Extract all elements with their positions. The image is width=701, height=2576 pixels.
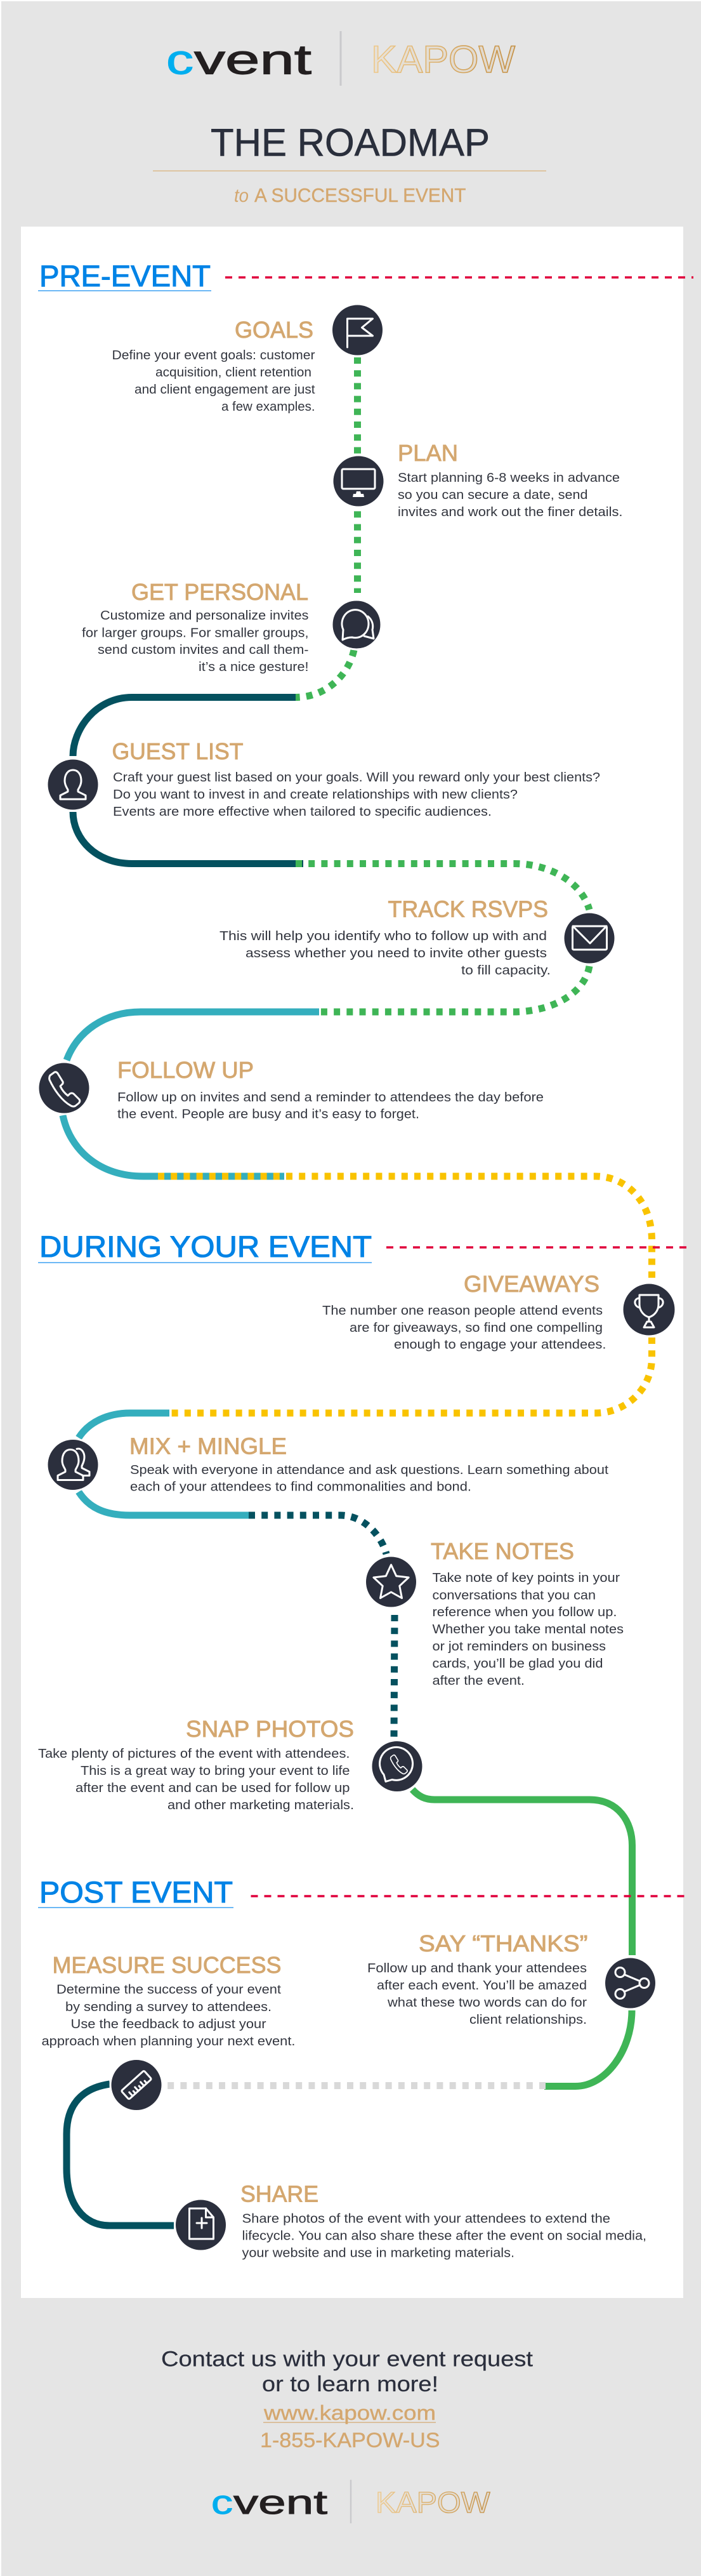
text block: Take plenty of pictures of the event with attendees. bbox=[38, 1747, 350, 1761]
icon: phone bbox=[38, 1062, 90, 1114]
route: follow up upper bbox=[67, 1012, 319, 1060]
white content panel bbox=[21, 227, 683, 2298]
text block: after the event and can be used for follow up bbox=[75, 1781, 350, 1795]
text block bbox=[242, 2212, 646, 2260]
text block: Craft your guest list based on your goals. Will you reward only your best clients? bbox=[113, 771, 600, 785]
text block: Determine the success of your event bbox=[56, 1983, 281, 1997]
header logos bbox=[166, 31, 515, 86]
heading: MIX + MINGLE bbox=[129, 1433, 287, 1459]
logo: cvent bbox=[211, 2484, 327, 2521]
icon: star bbox=[365, 1556, 417, 1608]
route: from track rsvps bbox=[319, 966, 589, 1012]
heading: MEASURE SUCCESS bbox=[52, 1952, 282, 1978]
text block bbox=[42, 1983, 296, 2048]
icon: share nodes bbox=[604, 1957, 656, 2009]
text block bbox=[322, 1304, 606, 1352]
text block: and client engagement are just bbox=[134, 383, 315, 397]
route: to take notes bbox=[249, 1515, 386, 1554]
step: guest list bbox=[47, 738, 600, 819]
heading: GUEST LIST bbox=[112, 738, 244, 764]
text block: Start planning 6-8 weeks in advance bbox=[398, 471, 620, 485]
heading: PLAN bbox=[398, 440, 458, 466]
icon: monitor bbox=[332, 455, 384, 507]
text block: after the event. bbox=[433, 1674, 525, 1688]
text block: for larger groups. For smaller groups, bbox=[82, 626, 308, 640]
text block: invites and work out the finer details. bbox=[398, 505, 623, 519]
step: track rsvps bbox=[219, 896, 615, 978]
phone number: 1-855-KAPOW-US bbox=[260, 2429, 440, 2452]
text block: client relationships. bbox=[469, 2013, 587, 2027]
heading: SNAP PHOTOS bbox=[186, 1716, 354, 1742]
icon: envelope bbox=[563, 912, 615, 964]
text block: to fill capacity. bbox=[461, 964, 551, 978]
step: share bbox=[175, 2181, 646, 2260]
footer contact bbox=[161, 2347, 534, 2452]
text block: send custom invites and call them- bbox=[98, 643, 308, 657]
contact text: or to learn more! bbox=[262, 2372, 438, 2396]
text block: Share photos of the event with your attendees to extend the bbox=[242, 2212, 610, 2226]
text block: the event. People are busy and it’s easy to forget. bbox=[117, 1107, 419, 1121]
contact text: Contact us with your event request bbox=[161, 2347, 534, 2372]
contact text bbox=[161, 2347, 534, 2396]
step: giveaways bbox=[322, 1271, 676, 1352]
heading: FOLLOW UP bbox=[117, 1057, 254, 1083]
step: snap photos bbox=[38, 1716, 423, 1812]
subtitle: A SUCCESSFUL EVENT bbox=[254, 185, 466, 206]
icon: person bbox=[47, 759, 99, 811]
text block: and other marketing materials. bbox=[167, 1798, 354, 1812]
heading: GOALS bbox=[235, 317, 313, 343]
step: follow up bbox=[38, 1057, 544, 1121]
step: get personal bbox=[82, 579, 381, 674]
text block: enough to engage your attendees. bbox=[394, 1338, 606, 1352]
title: THE ROADMAP bbox=[211, 121, 490, 164]
route: to snap photos bbox=[394, 1615, 395, 1738]
text block: approach when planning your next event. bbox=[42, 2035, 296, 2048]
route: get personal curve bbox=[296, 650, 354, 697]
logo: cvent bbox=[166, 36, 311, 83]
step: goals bbox=[112, 304, 383, 414]
text block bbox=[112, 349, 315, 414]
logo: cvent: vent bbox=[233, 2484, 327, 2521]
step: say thanks bbox=[367, 1930, 656, 2027]
heading underline bbox=[38, 1262, 372, 1263]
route: mix and mingle upper bbox=[79, 1413, 169, 1438]
route: to measure success bbox=[164, 2082, 546, 2089]
logo: cvent: c bbox=[166, 36, 193, 83]
route: goals to get personal bbox=[354, 357, 361, 593]
text block: lifecycle. You can also share these after the event on social media, bbox=[242, 2229, 646, 2243]
text block: Define your event goals: customer bbox=[112, 349, 315, 362]
text block: are for giveaways, so find one compelling bbox=[350, 1321, 603, 1335]
text block: Customize and personalize invites bbox=[100, 609, 308, 623]
route: to share bbox=[67, 2084, 174, 2226]
text block bbox=[219, 929, 551, 978]
text block: Follow up and thank your attendees bbox=[367, 1962, 587, 1975]
text block: your website and use in marketing materials. bbox=[242, 2246, 514, 2260]
text block: it’s a nice gesture! bbox=[199, 660, 308, 674]
route: mix and mingle lower bbox=[79, 1492, 249, 1515]
icon: file with plus bbox=[175, 2199, 227, 2251]
heading: TRACK RSVPS bbox=[388, 896, 548, 922]
text block: Use the feedback to adjust your bbox=[71, 2017, 266, 2031]
route: guest list upper bbox=[73, 697, 296, 756]
step: take notes bbox=[365, 1538, 624, 1688]
icon: trophy bbox=[622, 1283, 676, 1336]
text block bbox=[82, 609, 308, 674]
dashed divider bbox=[386, 1246, 688, 1249]
step: measure success bbox=[42, 1952, 296, 2111]
heading underline bbox=[38, 290, 211, 291]
text block: or jot reminders on business bbox=[433, 1640, 606, 1654]
heading: SHARE bbox=[240, 2181, 318, 2207]
text block: by sending a survey to attendees. bbox=[65, 2000, 272, 2014]
subtitle: to bbox=[234, 185, 249, 206]
text block: Whether you take mental notes bbox=[433, 1623, 624, 1637]
step: mix and mingle bbox=[47, 1433, 608, 1494]
heading: TAKE NOTES bbox=[431, 1538, 574, 1564]
heading underline bbox=[38, 1907, 233, 1908]
text block: Speak with everyone in attendance and ask questions. Learn something about bbox=[130, 1463, 608, 1477]
logo: cvent: vent bbox=[194, 36, 311, 83]
website link: www.kapow.com bbox=[263, 2401, 436, 2424]
route: guest list lower bbox=[73, 812, 303, 863]
text block: acquisition, client retention bbox=[155, 366, 311, 380]
text block: after each event. You’ll be amazed bbox=[377, 1979, 587, 1993]
footer logos bbox=[211, 2480, 490, 2523]
text block: so you can secure a date, send bbox=[398, 488, 587, 502]
logo: KAPOW: KAPOW bbox=[376, 2486, 490, 2519]
section heading: PRE-EVENT bbox=[39, 259, 211, 293]
text block: The number one reason people attend events bbox=[322, 1304, 603, 1318]
route: from giveaways bbox=[169, 1338, 652, 1413]
text block: Events are more effective when tailored to specific audiences. bbox=[113, 805, 492, 819]
text block bbox=[38, 1747, 354, 1812]
title rule bbox=[153, 170, 546, 171]
route line bbox=[63, 357, 652, 2226]
text block: This is a great way to bring your event to life bbox=[81, 1764, 350, 1778]
heading: SAY “THANKS” bbox=[419, 1930, 587, 1956]
text block: assess whether you need to invite other guests bbox=[246, 946, 547, 960]
icon: phone in speech bubble bbox=[371, 1741, 423, 1793]
text block bbox=[130, 1463, 608, 1494]
section heading: POST EVENT bbox=[39, 1875, 233, 1909]
logo: KAPOW: KAPOW bbox=[371, 38, 515, 81]
route: from say thanks bbox=[544, 2010, 632, 2086]
icon: chat bubbles bbox=[332, 600, 381, 649]
text block: each of your attendees to find commonalities and bond. bbox=[130, 1480, 471, 1494]
text block bbox=[113, 771, 600, 819]
route: to track rsvps bbox=[296, 863, 589, 910]
text block bbox=[367, 1962, 587, 2027]
text block: cards, you’ll be glad you did bbox=[433, 1657, 603, 1671]
text block: Take note of key points in your bbox=[433, 1571, 620, 1585]
dashed divider bbox=[225, 276, 693, 279]
text block: reference when you follow up. bbox=[433, 1605, 617, 1619]
step: plan bbox=[332, 440, 623, 519]
icon: two people bbox=[47, 1438, 99, 1490]
text block: what these two words can do for bbox=[387, 1996, 587, 2010]
logo divider bbox=[340, 31, 341, 86]
heading: GIVEAWAYS bbox=[464, 1271, 599, 1297]
route: to say thanks bbox=[412, 1789, 632, 1955]
text block bbox=[433, 1571, 624, 1688]
section heading: DURING YOUR EVENT bbox=[39, 1230, 372, 1263]
logo divider bbox=[350, 2480, 351, 2523]
icon: ruler bbox=[110, 2059, 162, 2111]
text block: Follow up on invites and send a reminder to attendees the day before bbox=[117, 1091, 544, 1105]
route: follow up lower bbox=[63, 1115, 284, 1176]
text block: a few examples. bbox=[221, 400, 315, 414]
text block: Do you want to invest in and create relationships with new clients? bbox=[113, 788, 518, 802]
dashed divider bbox=[251, 1895, 685, 1897]
text block: This will help you identify who to follow up with and bbox=[219, 929, 547, 943]
text block: conversations that you can bbox=[433, 1588, 596, 1602]
text block bbox=[398, 471, 623, 519]
text block bbox=[117, 1091, 544, 1121]
icon: flag bbox=[331, 304, 383, 356]
heading: GET PERSONAL bbox=[131, 579, 308, 605]
route: to giveaways bbox=[158, 1176, 652, 1280]
logo: cvent: c bbox=[211, 2484, 233, 2521]
